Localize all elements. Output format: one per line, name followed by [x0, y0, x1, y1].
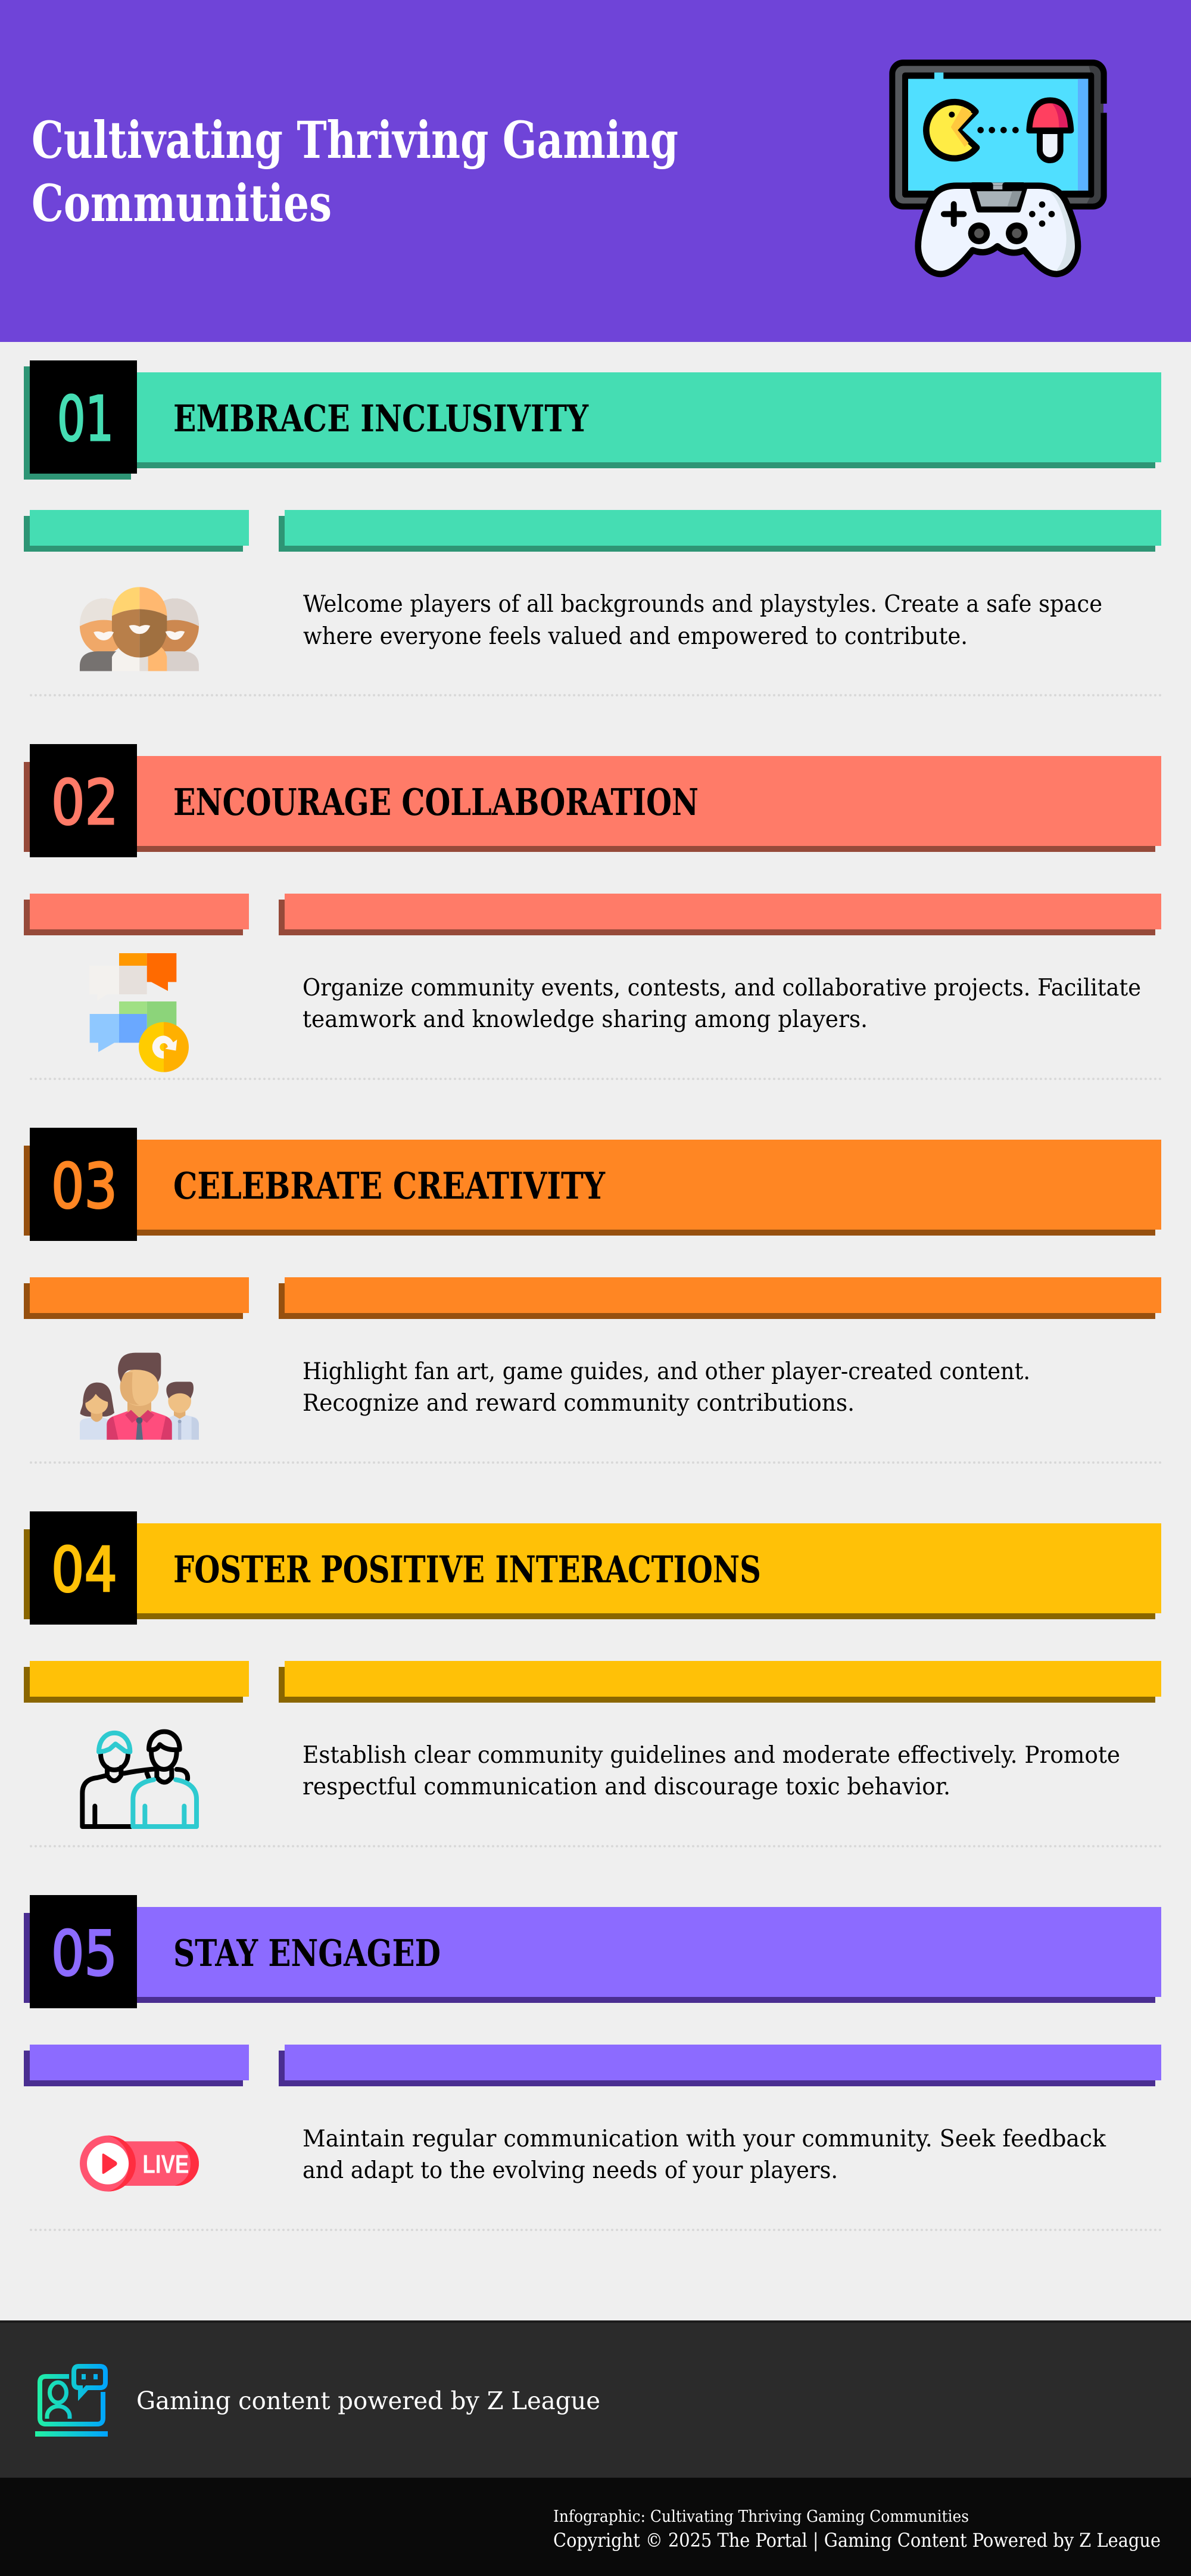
section 05: stay engaged	[24, 1895, 1161, 2230]
heading: STAY ENGAGED	[173, 1931, 441, 1975]
description: Highlight fan art, game guides, and other player-created content.	[303, 1358, 1030, 1385]
text bar	[279, 510, 1161, 552]
icon: chat bubbles	[89, 953, 189, 1072]
text bar	[279, 1277, 1161, 1319]
icon bar	[24, 894, 249, 935]
number badge: 01	[57, 384, 114, 455]
number badge: 03	[51, 1151, 117, 1222]
icon: chat and profile tablet	[35, 2366, 108, 2437]
infographic credit: Infographic: Cultivating Thriving Gaming Communities	[553, 2507, 969, 2526]
icon bar	[24, 1277, 249, 1319]
mushroom	[1029, 100, 1071, 160]
section 02: encourage collaboration	[24, 744, 1161, 1079]
title: Cultivating Thriving Gaming	[32, 111, 678, 170]
title	[32, 111, 678, 234]
heading: EMBRACE INCLUSIVITY	[173, 397, 589, 440]
description: and adapt to the evolving needs of your players.	[303, 2157, 838, 2184]
dots	[977, 127, 1019, 133]
section 04: foster positive interactions	[24, 1511, 1161, 1846]
text bar	[279, 1661, 1161, 1703]
footer band	[0, 2320, 1191, 2478]
icon: live badge	[80, 2136, 199, 2192]
icon bar	[24, 510, 249, 552]
text bar	[279, 894, 1161, 935]
controller	[918, 182, 1078, 274]
number badge	[30, 744, 137, 857]
description: where everyone feels valued and empowered to contribute.	[303, 623, 968, 650]
icon: two friends	[82, 1732, 197, 1827]
title: Communities	[32, 174, 332, 234]
description: Establish clear community guidelines and moderate effectively. Promote	[303, 1742, 1120, 1769]
description: respectful communication and discourage toxic behavior.	[303, 1774, 950, 1800]
description	[303, 1358, 1030, 1417]
icon: game monitor and controller	[889, 60, 1107, 274]
description: Maintain regular communication with your community. Seek feedback	[303, 2126, 1106, 2152]
section 01: embrace inclusivity	[24, 360, 1161, 695]
copyright band	[0, 2478, 1191, 2576]
heading: FOSTER POSITIVE INTERACTIONS	[173, 1548, 761, 1591]
icon: diverse people	[80, 587, 199, 671]
number badge	[30, 1511, 137, 1625]
copyright: Copyright © 2025 The Portal | Gaming Content Powered by Z League	[553, 2529, 1161, 2552]
description	[303, 975, 1141, 1033]
icon bar	[24, 2045, 249, 2086]
description: Welcome players of all backgrounds and playstyles. Create a safe space	[303, 591, 1102, 618]
footer tagline: Gaming content powered by Z League	[136, 2387, 600, 2415]
text bar	[279, 2045, 1161, 2086]
number badge: 02	[51, 767, 119, 839]
number badge	[30, 1128, 137, 1241]
description	[303, 1742, 1120, 1800]
heading: CELEBRATE CREATIVITY	[173, 1164, 606, 1208]
icon: live badge: LIVE	[142, 2150, 189, 2179]
description: Organize community events, contests, and collaborative projects. Facilitate	[303, 975, 1141, 1001]
section 03: celebrate creativity	[24, 1128, 1161, 1463]
number badge	[30, 1895, 137, 2008]
description	[303, 591, 1102, 650]
icon bar	[24, 1661, 249, 1703]
icon: team of people	[80, 1353, 199, 1440]
description	[303, 2126, 1106, 2184]
number badge	[30, 360, 137, 474]
pacman	[926, 102, 977, 158]
description: Recognize and reward community contributions.	[303, 1390, 855, 1417]
description: teamwork and knowledge sharing among players.	[303, 1006, 868, 1033]
heading: ENCOURAGE COLLABORATION	[173, 780, 699, 824]
number badge: 05	[51, 1918, 117, 1990]
number badge: 04	[51, 1535, 117, 1606]
header band	[0, 0, 1191, 342]
